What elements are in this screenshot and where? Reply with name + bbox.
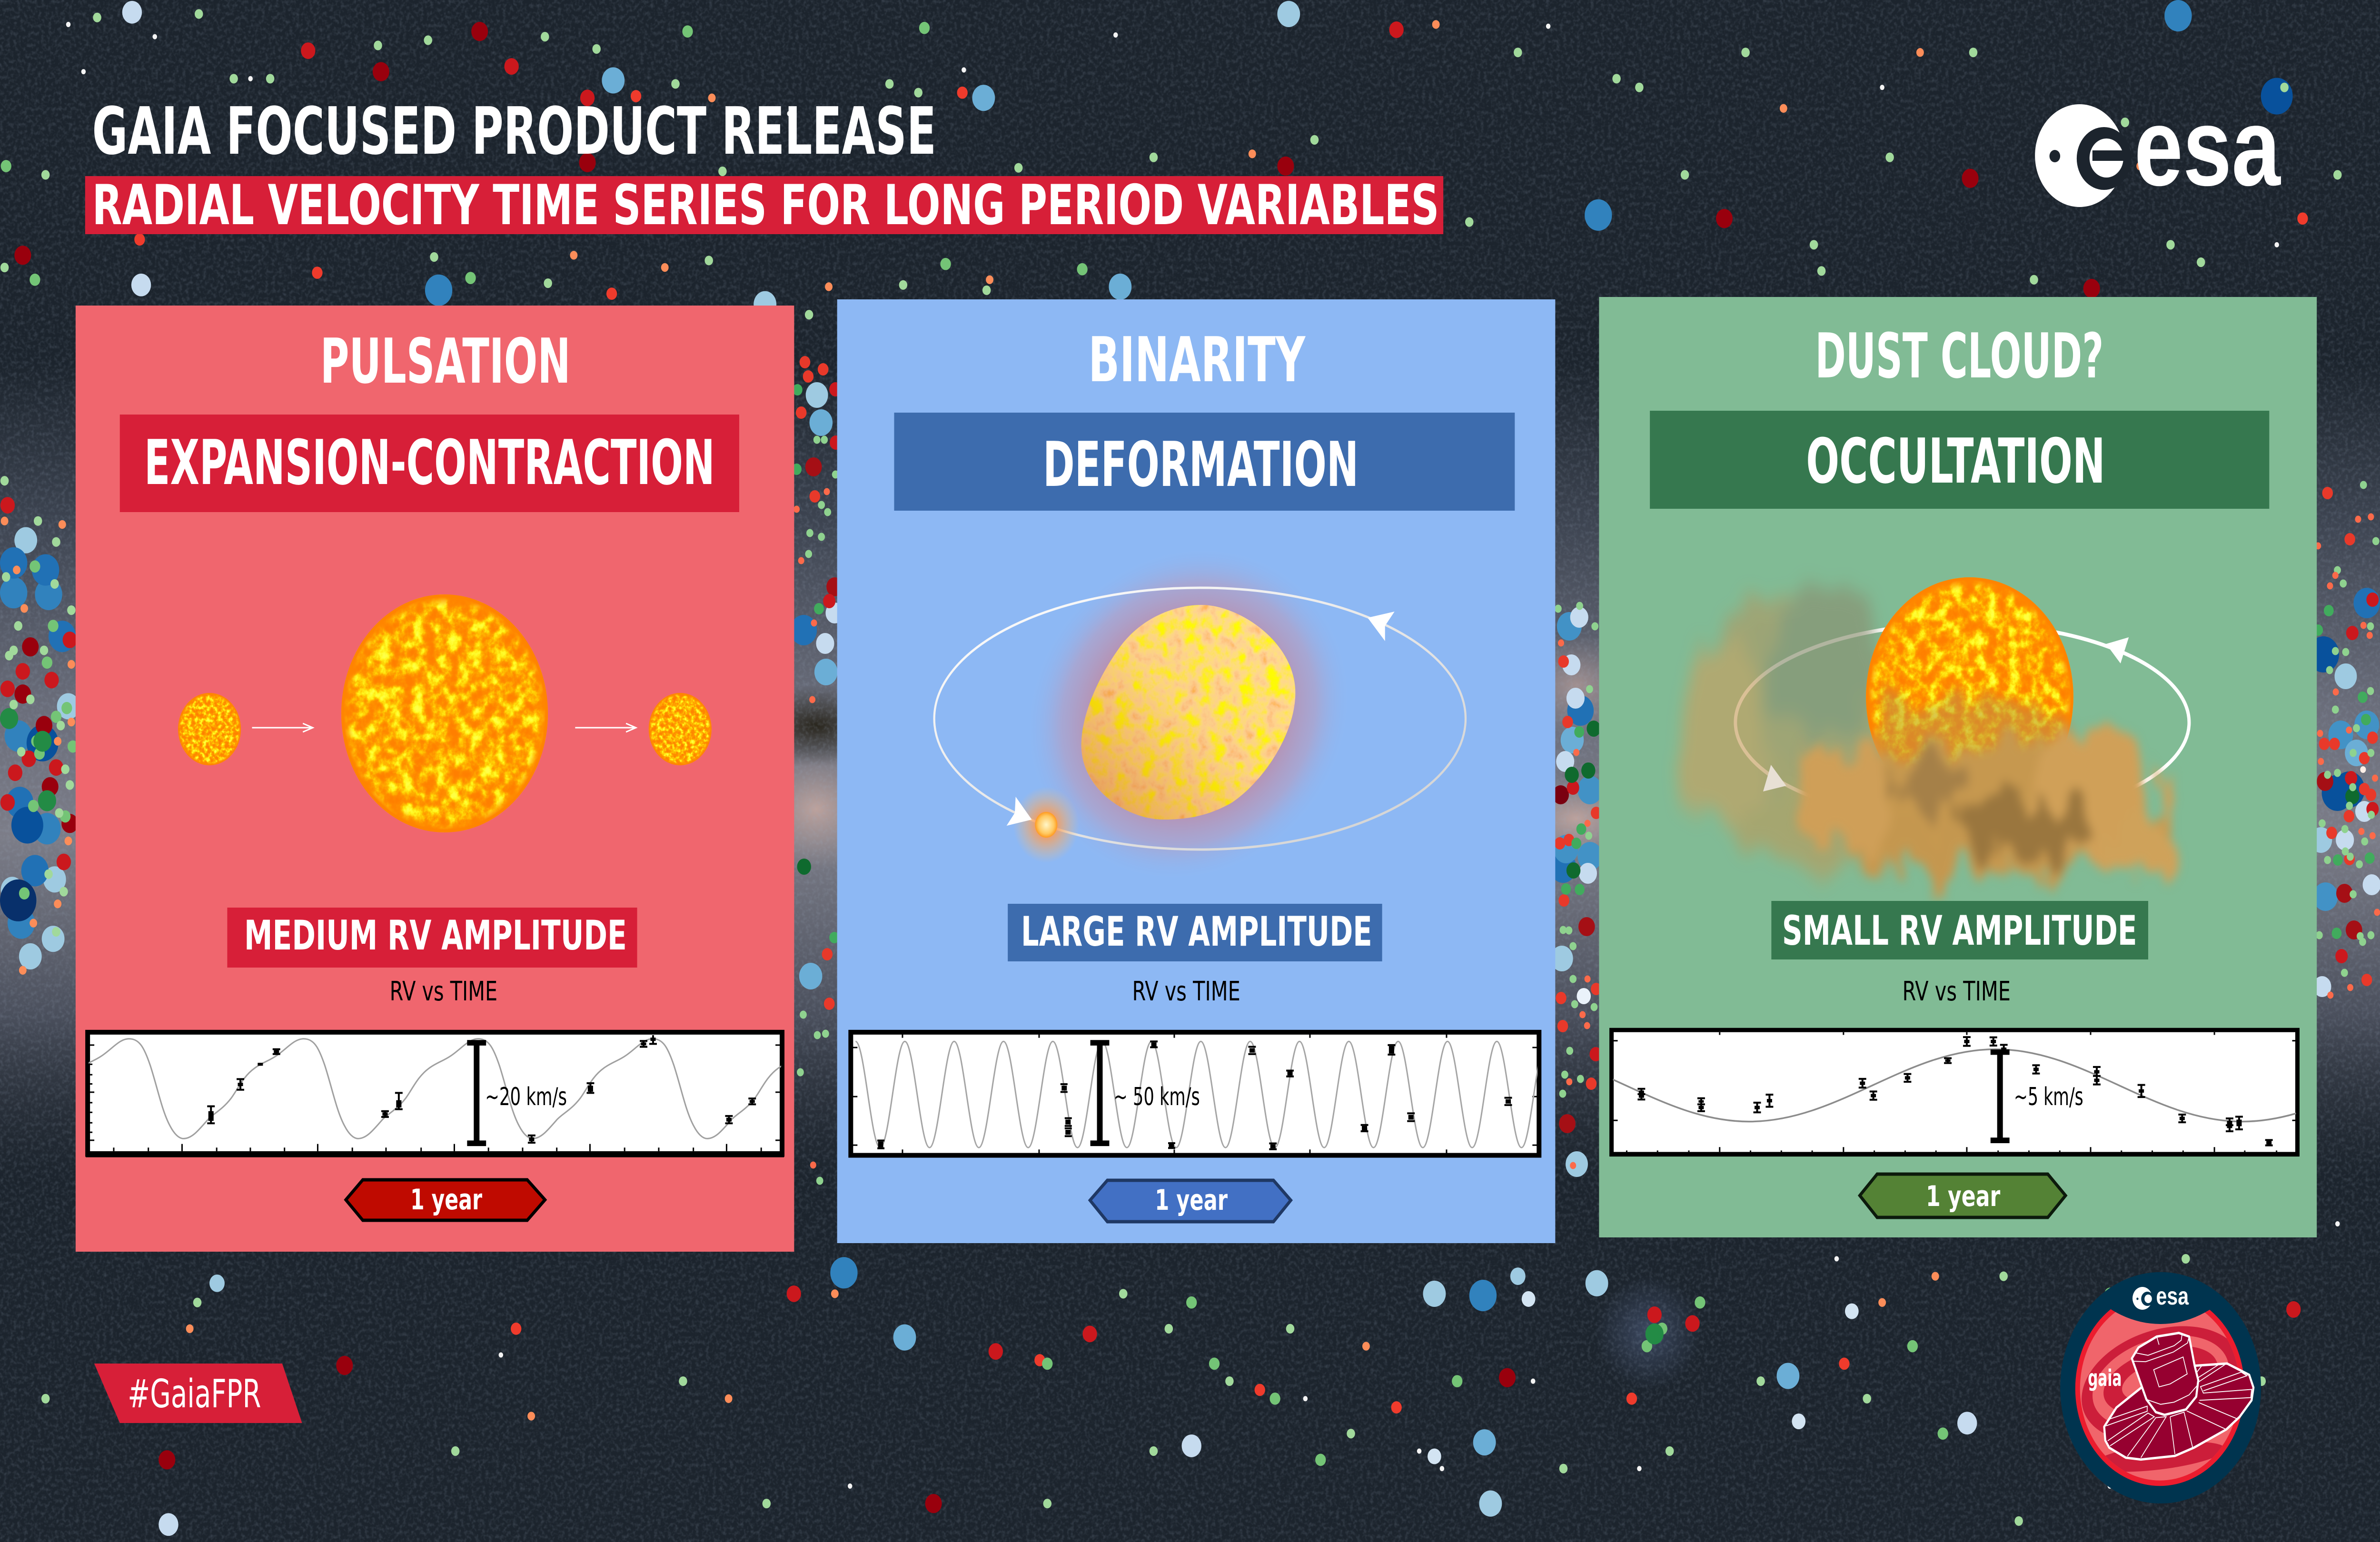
label: small RV amplitude: SMALL RV AMPLITUDE (1782, 907, 2137, 954)
main title: GAIA FOCUSED PRODUCT RELEASE (92, 94, 936, 169)
orbit (1735, 623, 2189, 821)
amplitude label: ~ 50 km/s (1113, 1083, 1200, 1111)
arrow: expansion to contraction (575, 723, 636, 732)
banner: deformation: DEFORMATION (1043, 428, 1359, 501)
arrow: contraction to expansion (252, 723, 313, 732)
icon: companion star (1013, 787, 1079, 863)
badge esa mark: esa (2156, 1283, 2189, 1310)
orbit (934, 588, 1466, 850)
scale bar: 20 km/s (467, 1040, 486, 1146)
subtitle banner: RADIAL VELOCITY TIME SERIES FOR LONG PERIOD VARIABLES (92, 173, 1439, 237)
panel: dust cloud (1502, 297, 2380, 1237)
icon: small contracted star right (649, 693, 712, 765)
label: medium RV amplitude (227, 908, 637, 968)
scale bar: 50 km/s (1091, 1040, 1109, 1146)
icon: large expanded star (341, 594, 548, 832)
panel: pulsation (75, 306, 794, 1252)
dense star dots in the panel gaps and right edge (797, 362, 2377, 1181)
icon: deformed star (1081, 605, 1295, 820)
period marker: 1 year (1090, 1180, 1291, 1222)
banner: expansion-contraction (120, 415, 739, 512)
period marker: 1 year: 1 year (410, 1184, 482, 1216)
scale bar: 5 km/s (1991, 1049, 2010, 1143)
glow: deformed star (984, 494, 1392, 933)
hashtag tab (94, 1364, 302, 1423)
badge esa mark (2132, 1283, 2189, 1310)
badge gaia label: gaia (2088, 1364, 2122, 1392)
dust cloud: front, dense (1797, 697, 2182, 876)
label: small RV amplitude (1771, 901, 2148, 959)
heading: pulsation: PULSATION (320, 325, 571, 397)
amplitude label: ~5 km/s (2014, 1083, 2083, 1111)
label: medium RV amplitude: MEDIUM RV AMPLITUDE (244, 911, 627, 959)
mission badge: gaia (2058, 1087, 2263, 1503)
chart title: RV vs TIME (1903, 976, 2011, 1007)
chart: RV curve, binarity (851, 1032, 1546, 1156)
chart title: RV vs TIME (1132, 976, 1240, 1007)
banner: occultation (1650, 411, 2269, 509)
logo: esa: esa (2134, 86, 2281, 209)
hashtag tab: #GaiaFPR (128, 1372, 261, 1417)
chart: RV curve, dust cloud (1502, 1030, 2380, 1156)
label: large RV amplitude (1008, 904, 1382, 961)
period marker: 1 year (1860, 1174, 2065, 1217)
chart title: RV vs TIME (390, 976, 497, 1007)
banner: expansion-contraction: EXPANSION-CONTRACTION (144, 426, 715, 499)
period marker: 1 year: 1 year (1155, 1184, 1228, 1217)
badge top arc (2058, 1087, 2263, 1324)
arrow: orbit lower left (1763, 765, 1786, 791)
icon: star behind cloud (1866, 577, 2073, 816)
banner: occultation: OCCULTATION (1806, 425, 2105, 497)
heading: binarity: BINARITY (1088, 324, 1306, 396)
panel: binarity (837, 299, 1555, 1243)
period marker: 1 year: 1 year (1926, 1180, 2000, 1213)
arrow: orbit upper right (2106, 637, 2129, 663)
logo: esa (2035, 86, 2281, 209)
amplitude label: ~20 km/s (485, 1083, 567, 1111)
icon: small contracted star left (178, 693, 241, 765)
chart: RV curve, pulsation (85, 1030, 784, 1157)
arrow: orbit lower left (1007, 797, 1032, 826)
label: large RV amplitude: LARGE RV AMPLITUDE (1021, 908, 1372, 955)
banner: deformation (894, 413, 1515, 511)
arrow: orbit upper right (1368, 612, 1395, 641)
dust cloud: back, faint (1677, 590, 1925, 871)
badge planet and spacecraft (2071, 1291, 2253, 1493)
period marker: 1 year (346, 1180, 545, 1220)
heading: dust cloud: DUST CLOUD? (1815, 320, 2103, 392)
